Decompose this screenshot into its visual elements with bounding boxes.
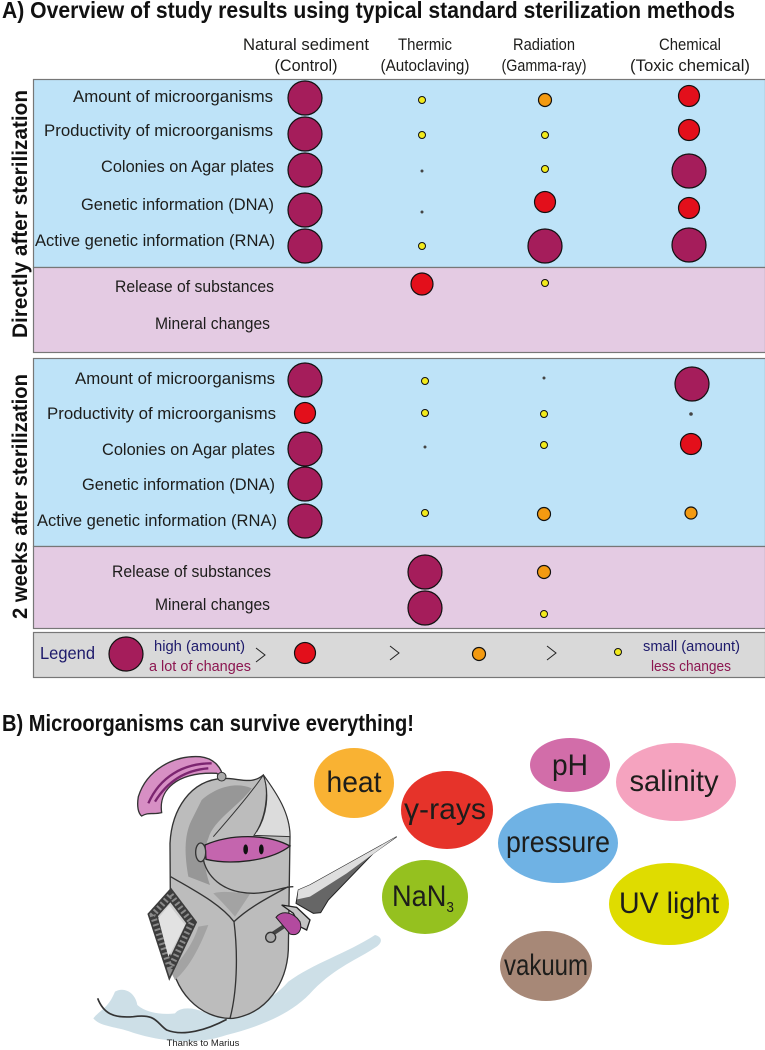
panel: 2 weeks, microorganism measures: Productivity of microorganisms — [47, 405, 276, 423]
horn highlight — [254, 775, 290, 837]
column headers — [243, 36, 750, 75]
legend: high (amount) — [154, 639, 245, 655]
column headers: Chemical — [659, 36, 721, 54]
bubble: pH — [530, 738, 610, 792]
panel: 2 weeks, microorganism measures — [34, 358, 765, 546]
column headers: (Control) — [274, 57, 338, 75]
panel: directly, microorganism measures: Amount of microorganisms — [73, 88, 273, 106]
panel: 2 weeks, substances and minerals: Release of substances — [112, 563, 271, 581]
bubble: pH: pH — [552, 749, 588, 782]
helmet shading — [186, 785, 252, 885]
bubble: vakuum — [500, 931, 592, 1001]
panel: 2 weeks, microorganism measures: Genetic information (DNA) — [82, 476, 275, 494]
panel: directly, microorganism measures: Active genetic information (RNA) — [35, 232, 275, 250]
bubble: salinity — [616, 743, 736, 821]
body — [170, 775, 290, 1018]
panel: directly, microorganism measures: Productivity of microorganisms — [44, 122, 273, 140]
bubble: gamma rays: γ-rays — [404, 793, 486, 826]
armour lines — [171, 860, 293, 1018]
legend: small (amount) — [643, 639, 740, 655]
panel: 2 weeks, substances and minerals: Mineral changes — [155, 596, 270, 614]
bubble: NaN3 — [382, 860, 468, 934]
panel: directly, substances and minerals: Release of substances — [115, 278, 274, 296]
illustration: knight microorganism — [93, 757, 397, 1041]
panel: directly, substances and minerals: Mineral changes — [155, 315, 270, 333]
panel: 2 weeks, microorganism measures: Colonies on Agar plates — [102, 441, 275, 459]
visor hinge — [196, 843, 206, 862]
column headers: Thermic — [398, 36, 452, 54]
panel: directly, microorganism measures: Genetic information (DNA) — [81, 196, 274, 214]
eyes — [243, 844, 248, 854]
panel: 2 weeks, microorganism measures: Amount of microorganisms — [75, 370, 275, 388]
legend: less changes — [651, 659, 731, 675]
side label: directly after sterilization: Directly after sterilization — [9, 90, 32, 338]
legend: a lot of changes — [149, 659, 251, 675]
bubble: NaN3: NaN — [392, 880, 452, 913]
bubble: salinity: salinity — [630, 765, 718, 798]
bubble: vakuum: vakuum — [504, 949, 588, 982]
panel: directly, microorganism measures — [34, 80, 765, 268]
column headers: Radiation — [513, 36, 575, 54]
panel: 2 weeks, substances and minerals — [34, 546, 765, 628]
credit: Thanks to Marius — [167, 1038, 240, 1049]
panel: 2 weeks, microorganism measures: Active genetic information (RNA) — [37, 512, 277, 530]
bubble: heat — [314, 748, 394, 818]
legend: Legend — [40, 643, 95, 663]
helmet line — [213, 775, 267, 837]
chest shading — [171, 892, 250, 980]
plume — [138, 757, 223, 816]
column headers: Natural sediment — [243, 36, 369, 54]
sword — [296, 837, 397, 913]
column headers: (Gamma-ray) — [502, 57, 586, 75]
shadow — [93, 935, 381, 1041]
side label: 2 weeks after sterilization: 2 weeks after sterilization — [9, 374, 32, 619]
bubble: heat: heat — [326, 766, 382, 799]
legend — [34, 632, 765, 678]
visor — [205, 837, 290, 862]
title B: B) Microorganisms can survive everything! — [2, 710, 414, 736]
bubble: pressure: pressure — [506, 826, 610, 859]
bubble: UV light — [609, 863, 729, 945]
panel: directly, substances and minerals — [34, 268, 765, 352]
bubble: NaN3: 3 — [446, 899, 454, 916]
tail — [98, 998, 227, 1033]
bubble: UV light: UV light — [619, 887, 720, 920]
column headers: (Autoclaving) — [380, 57, 470, 75]
panel: directly, microorganism measures: Colonies on Agar plates — [101, 158, 274, 176]
shield — [153, 895, 192, 968]
bubble: pressure — [498, 803, 618, 883]
bubble: gamma rays — [401, 771, 493, 849]
column headers: (Toxic chemical) — [630, 57, 750, 75]
